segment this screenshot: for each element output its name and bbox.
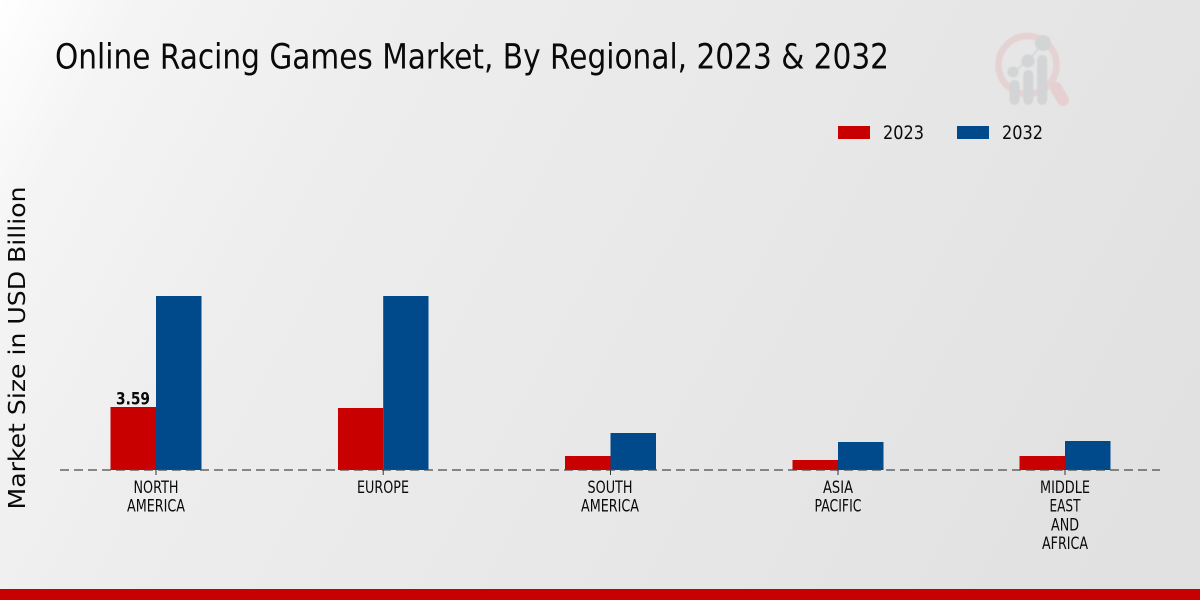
- legend item: 2032: [957, 122, 1043, 144]
- y axis title: Market Size in USD Billion: [3, 187, 31, 509]
- label: Asia Pacific: ASIA: [823, 478, 854, 497]
- label: Europe: EUROPE: [357, 478, 409, 497]
- icon: watermark logo magnifier with bars: [998, 35, 1063, 105]
- label: South America: SOUTH: [588, 478, 632, 497]
- legend item: 2023: 2023: [883, 122, 924, 144]
- legend: [838, 122, 1043, 144]
- category labels: EAST: [1050, 496, 1081, 516]
- label: North America: NORTH: [134, 478, 178, 497]
- footer bar: [0, 589, 1200, 600]
- category labels: AMERICA: [127, 496, 186, 516]
- category labels: AMERICA: [581, 496, 640, 516]
- Asia Pacific bars: [792, 442, 884, 470]
- South America bars: [565, 433, 656, 470]
- legend item: 2023: [838, 122, 924, 144]
- category labels: AND: [1051, 516, 1079, 534]
- data label: 3.59: [116, 390, 150, 408]
- Europe bars: [338, 296, 428, 470]
- bar chart: [60, 296, 1160, 475]
- North America bars: [110, 296, 202, 470]
- Middle East and Africa bars: [1020, 441, 1110, 470]
- legend item: 2032: 2032: [1002, 122, 1043, 144]
- category labels: [127, 478, 1090, 553]
- label: Middle East and Africa: MIDDLE: [1040, 478, 1090, 497]
- baseline: [60, 469, 1160, 471]
- category labels: PACIFIC: [814, 496, 862, 516]
- category labels: AFRICA: [1042, 534, 1089, 553]
- title: Online Racing Games Market, By Regional, 2023 & 2032: [55, 38, 889, 78]
